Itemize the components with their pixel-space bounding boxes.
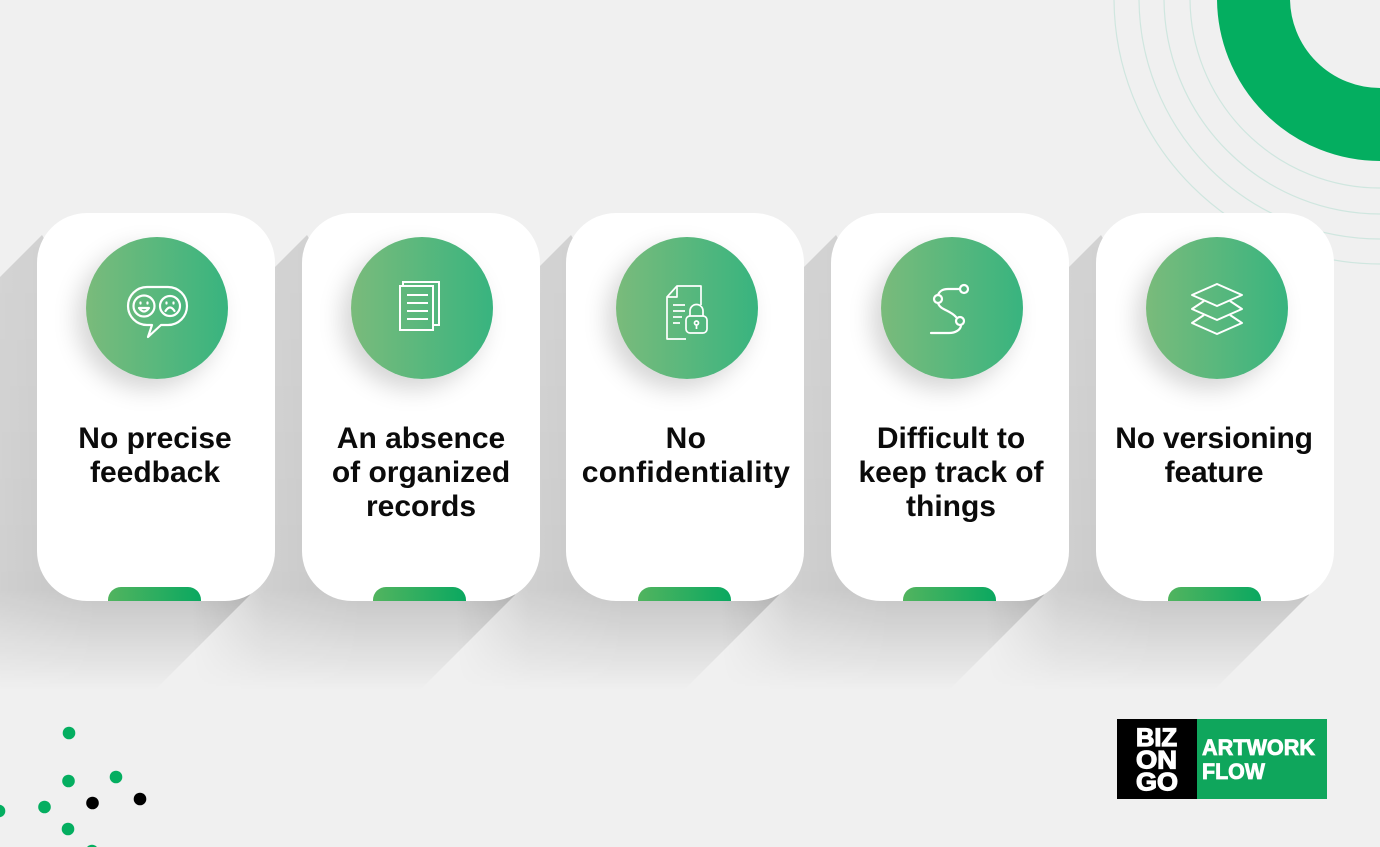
icon: locked document [616,237,758,379]
label [1115,422,1313,489]
green tab [1168,587,1261,601]
label: keep track of [858,456,1044,489]
logo: Bizongo Artwork Flow [1117,719,1327,799]
label: feature [1165,456,1263,489]
panel: no confidentiality [566,213,804,601]
label [332,422,510,523]
panel: no versioning feature [1096,213,1334,601]
label [78,422,232,489]
decorative dots bottom left [0,726,146,847]
label: No precise [78,422,232,455]
logo: Bizongo Artwork Flow: BIZ [1136,724,1177,752]
label: of organized [332,456,510,489]
panel: no precise feedback [37,213,275,601]
icon: feedback speech bubble [86,237,228,379]
logo: Bizongo Artwork Flow: FLOW [1202,759,1265,784]
panel: an absence of organized records [302,213,540,601]
label [582,422,790,489]
label: No versioning [1115,422,1313,455]
icon: winding path with nodes [881,237,1023,379]
green tab [638,587,731,601]
label: Difficult to [877,422,1025,455]
green tab [903,587,996,601]
label: records [366,490,476,523]
long card shadows [0,235,1309,672]
label: confidentiality [582,456,790,489]
logo: Bizongo Artwork Flow: ON [1136,746,1177,774]
label: feedback [90,456,220,489]
label: An absence [337,422,505,455]
icon: stacked documents [351,237,493,379]
label [858,422,1044,523]
green tab [108,587,201,601]
label: things [906,490,996,523]
panel: difficult to keep track of things [831,213,1069,601]
logo: Bizongo Artwork Flow: ARTWORK [1202,735,1315,760]
icon: layers [1146,237,1288,379]
logo: Bizongo Artwork Flow: GO [1136,768,1178,796]
green tab [373,587,466,601]
label: No [666,422,706,455]
